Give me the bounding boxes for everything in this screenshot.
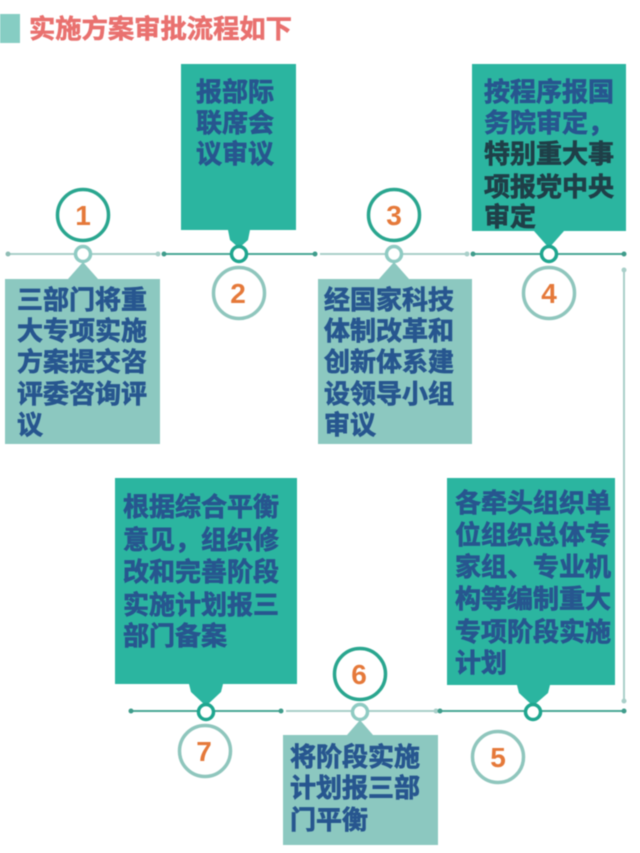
step 1: [5, 190, 160, 444]
step 3 panel: 经国家科技: [324, 285, 454, 315]
step 3 panel: 设领导小组: [324, 379, 454, 409]
step 2 panel: [181, 64, 296, 248]
step 4 panel: 审定: [484, 202, 536, 232]
step 6 number badge: [334, 648, 386, 700]
step 6 node: [352, 704, 368, 720]
step 4 panel: 项报党中央: [484, 172, 614, 202]
step 2 panel: 报部际: [196, 77, 274, 107]
step 4 panel: 特别重大事: [484, 139, 614, 169]
connector: vertical line on right: [622, 268, 626, 704]
step 1 panel: 方案提交咨: [17, 347, 147, 377]
step 6 panel: [283, 720, 438, 845]
step 1 panel: 议: [17, 410, 43, 440]
step 6: [283, 648, 438, 845]
step 5 panel: 各牵头组织单: [455, 488, 611, 518]
step 5 panel: 家组、专业机: [455, 552, 611, 582]
step 4 number badge: 4: [541, 278, 557, 309]
step 7 panel: [115, 478, 297, 706]
step 1 number badge: 1: [75, 200, 91, 231]
step 7 panel: 改和完善阶段: [123, 557, 279, 587]
step 4 panel: [472, 64, 626, 248]
step 2 number badge: 2: [230, 278, 246, 309]
step 4 node: [542, 246, 556, 262]
step 6 number badge: 6: [351, 659, 367, 690]
step 5 panel: 计划: [455, 648, 507, 678]
step 4 number badge: [524, 268, 574, 318]
step 3 panel: 创新体系建: [324, 347, 454, 377]
step 5 panel: [447, 478, 615, 706]
step 7 panel: 实施计划报三: [123, 590, 279, 620]
step 6 panel: 门平衡: [290, 805, 368, 835]
step 7 panel: 意见，组织修: [123, 525, 279, 555]
step 7 panel: 部门备案: [123, 621, 227, 651]
step 5 panel: 位组织总体专: [455, 520, 611, 550]
step 7 node: [198, 704, 214, 720]
step 5 panel: 专项阶段实施: [455, 617, 611, 647]
step 2 node: [232, 246, 246, 262]
step 4: [472, 64, 626, 318]
step 1 panel: [5, 262, 160, 444]
step 5 number badge: 5: [490, 742, 506, 773]
step 7: [115, 478, 297, 776]
step 3 node: [386, 246, 402, 262]
step 2 panel: 联席会: [196, 108, 274, 138]
timeline: bottom row: [128, 708, 626, 714]
step 4 panel: 按程序报国: [484, 77, 614, 107]
step 3 number badge: 3: [386, 200, 402, 231]
step 3: [318, 190, 472, 444]
step 1 panel: 评委咨询评: [17, 379, 147, 409]
step 5: [447, 478, 615, 782]
step 7 number badge: [180, 726, 230, 776]
step 3 number badge: [368, 190, 420, 240]
step 3 panel: [318, 262, 472, 444]
title: 实施方案审批流程如下: [29, 14, 292, 44]
step 7 panel: 根据综合平衡: [123, 492, 279, 522]
step 1 node: [76, 246, 90, 262]
step 5 number badge: [472, 732, 524, 782]
step 7 number badge: 7: [196, 736, 212, 767]
step 1 number badge: [58, 190, 108, 240]
step 5 node: [526, 704, 540, 720]
step 2 number badge: [214, 268, 264, 318]
step 1 panel: 大专项实施: [17, 316, 147, 346]
timeline: top row: [6, 252, 626, 256]
step 1 panel: 三部门将重: [17, 285, 147, 315]
step 4 panel: 务院审定，: [484, 108, 614, 138]
step 6 panel: 将阶段实施: [290, 742, 420, 772]
step 3 panel: 审议: [324, 410, 376, 440]
step 2: [181, 64, 296, 318]
step 5 panel: 构等编制重大: [455, 584, 611, 614]
step 3 panel: 体制改革和: [324, 316, 454, 346]
step 2 panel: 议审议: [196, 139, 274, 169]
step 6 panel: 计划报三部: [290, 773, 420, 803]
title accent square: [0, 14, 20, 43]
